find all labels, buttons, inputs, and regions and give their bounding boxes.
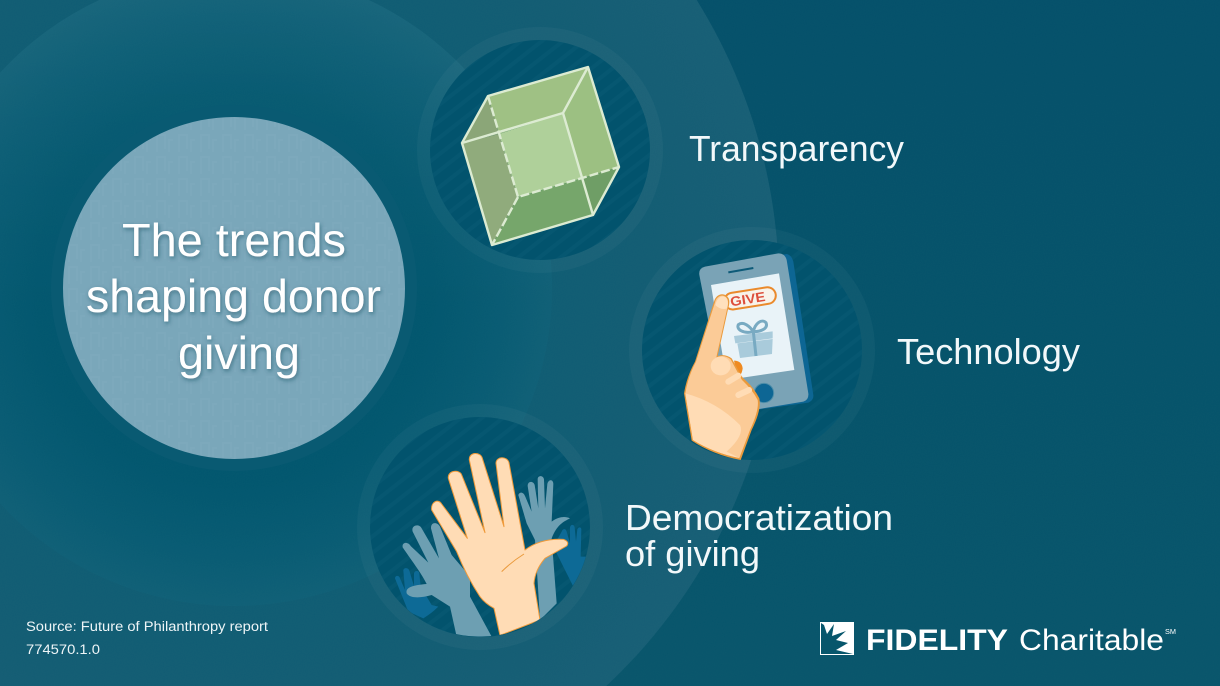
logo: Fidelity Charitable: SM (1165, 629, 1176, 636)
icon: phone with hand (684, 253, 813, 460)
icon: phone with hand: GIVE (729, 289, 767, 309)
icon: sunburst square (820, 622, 854, 655)
label: Technology: Technology (897, 331, 1080, 372)
label: Democratization of giving: Democratization (625, 497, 893, 538)
label: Democratization of giving: of giving (625, 533, 760, 574)
title (86, 214, 381, 379)
panel: democratization of giving (370, 417, 891, 637)
main circle: title (51, 105, 417, 471)
label: Democratization of giving (625, 497, 893, 574)
title: giving (178, 327, 300, 379)
logo: Fidelity Charitable: Charitable (1019, 624, 1164, 657)
icon: raised hands (395, 454, 588, 637)
logo: Fidelity Charitable: FIDELITY (866, 624, 1008, 657)
title: shaping donor (86, 270, 381, 322)
label: Transparency: Transparency (689, 128, 904, 169)
panel: transparency (417, 27, 904, 273)
panel: technology (629, 227, 1080, 473)
source note: 774570.1.0 (26, 642, 100, 657)
title: The trends (122, 214, 346, 266)
source note: Source: Future of Philanthropy report (26, 619, 268, 634)
logo: Fidelity Charitable (820, 622, 1176, 657)
source note (26, 619, 268, 657)
icon: transparent cube (462, 67, 619, 245)
